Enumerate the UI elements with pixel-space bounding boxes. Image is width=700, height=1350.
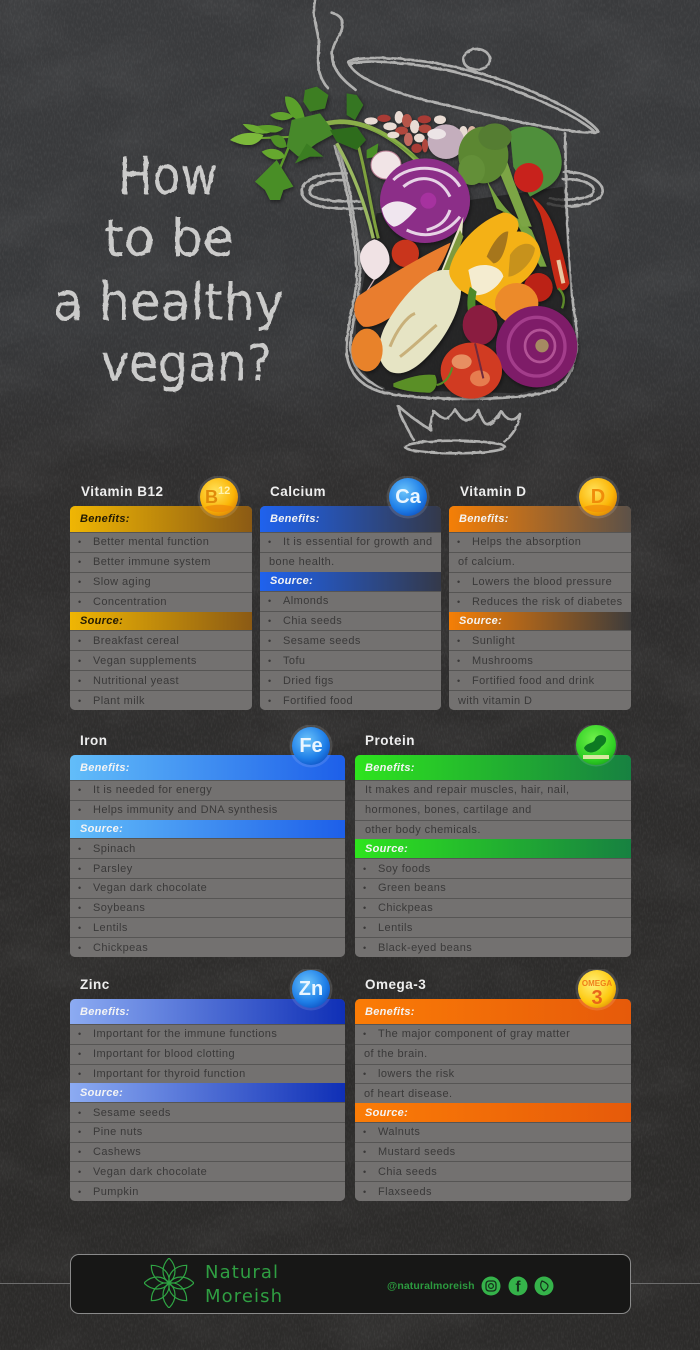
panel: Zinc — [70, 969, 345, 1201]
table: • — [78, 537, 82, 547]
icon: instagram — [482, 1276, 500, 1296]
table: • — [78, 1069, 82, 1079]
table: of calcium. — [458, 556, 515, 568]
table: • — [78, 1187, 82, 1197]
table: Nutritional yeast — [93, 675, 179, 687]
heading: Omega-3 — [365, 977, 426, 992]
lettuce — [510, 127, 562, 197]
table — [449, 506, 631, 710]
icon: Omega 3 badge: 3 — [591, 987, 603, 1009]
carrot slice right — [495, 283, 538, 324]
table: Chia seeds — [283, 615, 342, 627]
table: Walnuts — [378, 1126, 420, 1138]
table: Sunlight — [472, 635, 515, 647]
table: • — [363, 1127, 367, 1137]
table — [70, 506, 252, 710]
table — [70, 999, 345, 1201]
table: • — [78, 1127, 82, 1137]
table: Benefits: — [270, 513, 320, 525]
table: Important for the immune functions — [93, 1028, 277, 1040]
table: Vegan dark chocolate — [93, 1166, 207, 1178]
table: Helps immunity and DNA synthesis — [93, 804, 278, 816]
table: hormones, bones, cartilage and — [365, 804, 532, 816]
table: other body chemicals. — [365, 824, 481, 836]
table: • — [268, 636, 272, 646]
beans — [364, 111, 476, 153]
table: • — [78, 557, 82, 567]
table: Benefits: — [365, 1006, 415, 1018]
table — [355, 755, 631, 957]
table: • — [363, 1187, 367, 1197]
table: Mustard seeds — [378, 1146, 456, 1158]
table: Lowers the blood pressure — [472, 576, 612, 588]
table: • — [363, 943, 367, 953]
icon: Zn badge — [290, 969, 332, 1010]
table: Chickpeas — [93, 942, 148, 954]
heading: Protein — [365, 733, 415, 748]
table: Lentils — [93, 922, 128, 934]
table: Helps the absorption — [472, 536, 581, 548]
heading: Zinc — [80, 977, 110, 992]
table: Vegan dark chocolate — [93, 882, 207, 894]
brand name: Natural — [205, 1262, 279, 1283]
panel: Vitamin D — [449, 476, 631, 710]
table: Benefits: — [80, 762, 130, 774]
table: Flaxseeds — [378, 1186, 432, 1198]
table: Source: — [459, 615, 502, 627]
table — [355, 999, 631, 1201]
table: It makes and repair muscles, hair, nail, — [365, 784, 570, 796]
table: Source: — [270, 575, 313, 587]
garlic — [428, 124, 464, 159]
table: lowers the risk — [378, 1068, 455, 1080]
table: • — [363, 883, 367, 893]
table: Source: — [80, 823, 123, 835]
beet — [463, 305, 497, 345]
table: Chickpeas — [378, 902, 433, 914]
table: bone health. — [269, 556, 335, 568]
title: How to be a healthy vegan?: vegan? — [101, 334, 272, 394]
panel: Vitamin B12 — [70, 476, 252, 710]
table: Mushrooms — [472, 655, 533, 667]
table: Source: — [365, 843, 408, 855]
table: • — [78, 656, 82, 666]
table: • — [268, 537, 272, 547]
icon: Fe badge: Fe — [299, 735, 323, 757]
table: It is essential for growth and — [283, 536, 433, 548]
table: Better immune system — [93, 556, 211, 568]
social handle: @naturalmoreish — [387, 1280, 475, 1292]
icon: B12 badge: B — [205, 487, 218, 507]
table: • — [78, 1029, 82, 1039]
icon: Zn badge: Zn — [299, 978, 323, 1000]
table: • — [78, 805, 82, 815]
icon: B12 badge: 12 — [218, 485, 230, 497]
brand name: Moreish — [205, 1286, 283, 1307]
table: • — [78, 1108, 82, 1118]
table: • — [78, 864, 82, 874]
table: • — [78, 903, 82, 913]
small green pepper — [393, 375, 437, 393]
icon: D badge: D — [591, 486, 605, 508]
icon: B12 badge — [198, 476, 240, 518]
table: • — [78, 636, 82, 646]
table: Dried figs — [283, 675, 334, 687]
icon: facebook: f — [516, 1278, 522, 1296]
table: Better mental function — [93, 536, 209, 548]
dark shadow inside pot — [356, 187, 573, 393]
table: Slow aging — [93, 576, 151, 588]
table: Concentration — [93, 596, 167, 608]
panel: Omega-3 — [355, 969, 631, 1201]
table: • — [268, 676, 272, 686]
red onion — [496, 306, 577, 387]
table: Almonds — [283, 595, 329, 607]
icon: Omega 3 badge — [576, 969, 618, 1010]
table: • — [457, 676, 461, 686]
illustration: chalk pot filled with vegetables — [230, 0, 604, 456]
table: • — [78, 785, 82, 795]
table: with vitamin D — [458, 695, 532, 707]
table: • — [78, 883, 82, 893]
table: • — [78, 696, 82, 706]
table: • — [268, 696, 272, 706]
title: How to be a healthy vegan?: How — [118, 147, 218, 207]
table: Benefits: — [80, 1006, 130, 1018]
table: Benefits: — [365, 762, 415, 774]
table: • — [268, 596, 272, 606]
chalk pot drawing — [302, 0, 603, 453]
table: • — [78, 577, 82, 587]
table: • — [78, 923, 82, 933]
table: • — [457, 656, 461, 666]
table: Plant milk — [93, 695, 145, 707]
small tomato — [392, 240, 419, 267]
table: • — [268, 656, 272, 666]
table: • — [363, 1147, 367, 1157]
title: How to be a healthy vegan?: a healthy — [53, 273, 284, 333]
heading: Calcium — [270, 484, 326, 499]
table: Sesame seeds — [93, 1107, 171, 1119]
table: • — [363, 864, 367, 874]
table — [260, 506, 441, 710]
broccoli — [487, 180, 547, 267]
tomato top — [514, 163, 543, 192]
table: The major component of gray matter — [378, 1028, 570, 1040]
table: • — [78, 597, 82, 607]
table: of heart disease. — [364, 1088, 452, 1100]
table: Source: — [80, 1087, 123, 1099]
icon: Omega 3 badge: OMEGA — [582, 979, 612, 988]
table: Soy foods — [378, 863, 431, 875]
tomato right — [524, 273, 553, 302]
chili — [532, 197, 569, 290]
parsley — [230, 87, 420, 238]
icon: Ca badge: Ca — [395, 486, 422, 508]
table: • — [457, 636, 461, 646]
table: Spinach — [93, 843, 136, 855]
table: Soybeans — [93, 902, 145, 914]
title: How to be a healthy vegan? — [53, 147, 284, 394]
panel: Calcium — [260, 476, 441, 710]
panel: Iron — [70, 725, 345, 957]
table: Benefits: — [80, 513, 130, 525]
table: Important for blood clotting — [93, 1048, 235, 1060]
table: • — [78, 1147, 82, 1157]
table: Fortified food — [283, 695, 353, 707]
heading: Vitamin B12 — [81, 484, 164, 499]
icon: D badge — [576, 476, 620, 518]
table: • — [457, 597, 461, 607]
table: Reduces the risk of diabetes — [472, 596, 623, 608]
icon: protein badge — [574, 725, 618, 766]
table: Parsley — [93, 863, 133, 875]
table: • — [363, 1069, 367, 1079]
table: Chia seeds — [378, 1166, 437, 1178]
table: Black-eyed beans — [378, 942, 472, 954]
table: • — [363, 903, 367, 913]
table: Cashews — [93, 1146, 141, 1158]
panel: Protein — [355, 725, 631, 957]
table: • — [78, 1167, 82, 1177]
table: • — [457, 537, 461, 547]
table: Pumpkin — [93, 1186, 139, 1198]
icon: Ca badge — [386, 476, 430, 518]
table: Benefits: — [459, 513, 509, 525]
table: Fortified food and drink — [472, 675, 595, 687]
heading: Iron — [80, 733, 108, 748]
logo mark — [144, 1258, 194, 1308]
footer bar — [0, 1254, 700, 1314]
zucchini — [379, 217, 463, 373]
table: • — [363, 1029, 367, 1039]
table: • — [78, 1049, 82, 1059]
table: Source: — [80, 615, 123, 627]
table: Source: — [365, 1107, 408, 1119]
yellow pepper — [449, 212, 541, 312]
radish — [360, 239, 390, 280]
icon: facebook — [508, 1276, 528, 1296]
tomato half — [441, 343, 502, 399]
heading: Vitamin D — [460, 484, 527, 499]
icon: vegan leaf — [534, 1276, 554, 1296]
icon: Fe badge — [290, 725, 332, 768]
table: Green beans — [378, 882, 446, 894]
table — [70, 755, 345, 957]
title: How to be a healthy vegan?: to be — [104, 209, 234, 269]
table: Pine nuts — [93, 1126, 143, 1138]
table: • — [268, 616, 272, 626]
table: Important for thyroid function — [93, 1068, 246, 1080]
vegetables — [230, 87, 577, 399]
cabbage — [380, 158, 470, 243]
table: • — [363, 1167, 367, 1177]
table: Breakfast cereal — [93, 635, 179, 647]
table: Sesame seeds — [283, 635, 361, 647]
table: • — [78, 943, 82, 953]
carrot — [354, 243, 451, 327]
table: Tofu — [283, 655, 305, 667]
table: of the brain. — [364, 1048, 428, 1060]
brand name — [205, 1262, 283, 1307]
table: Vegan supplements — [93, 655, 197, 667]
carrot slice left — [351, 329, 383, 371]
table: Lentils — [378, 922, 413, 934]
table: • — [363, 923, 367, 933]
table: • — [78, 844, 82, 854]
table: • — [78, 676, 82, 686]
table: It is needed for energy — [93, 784, 212, 796]
radish slice — [371, 151, 401, 179]
table: • — [457, 577, 461, 587]
